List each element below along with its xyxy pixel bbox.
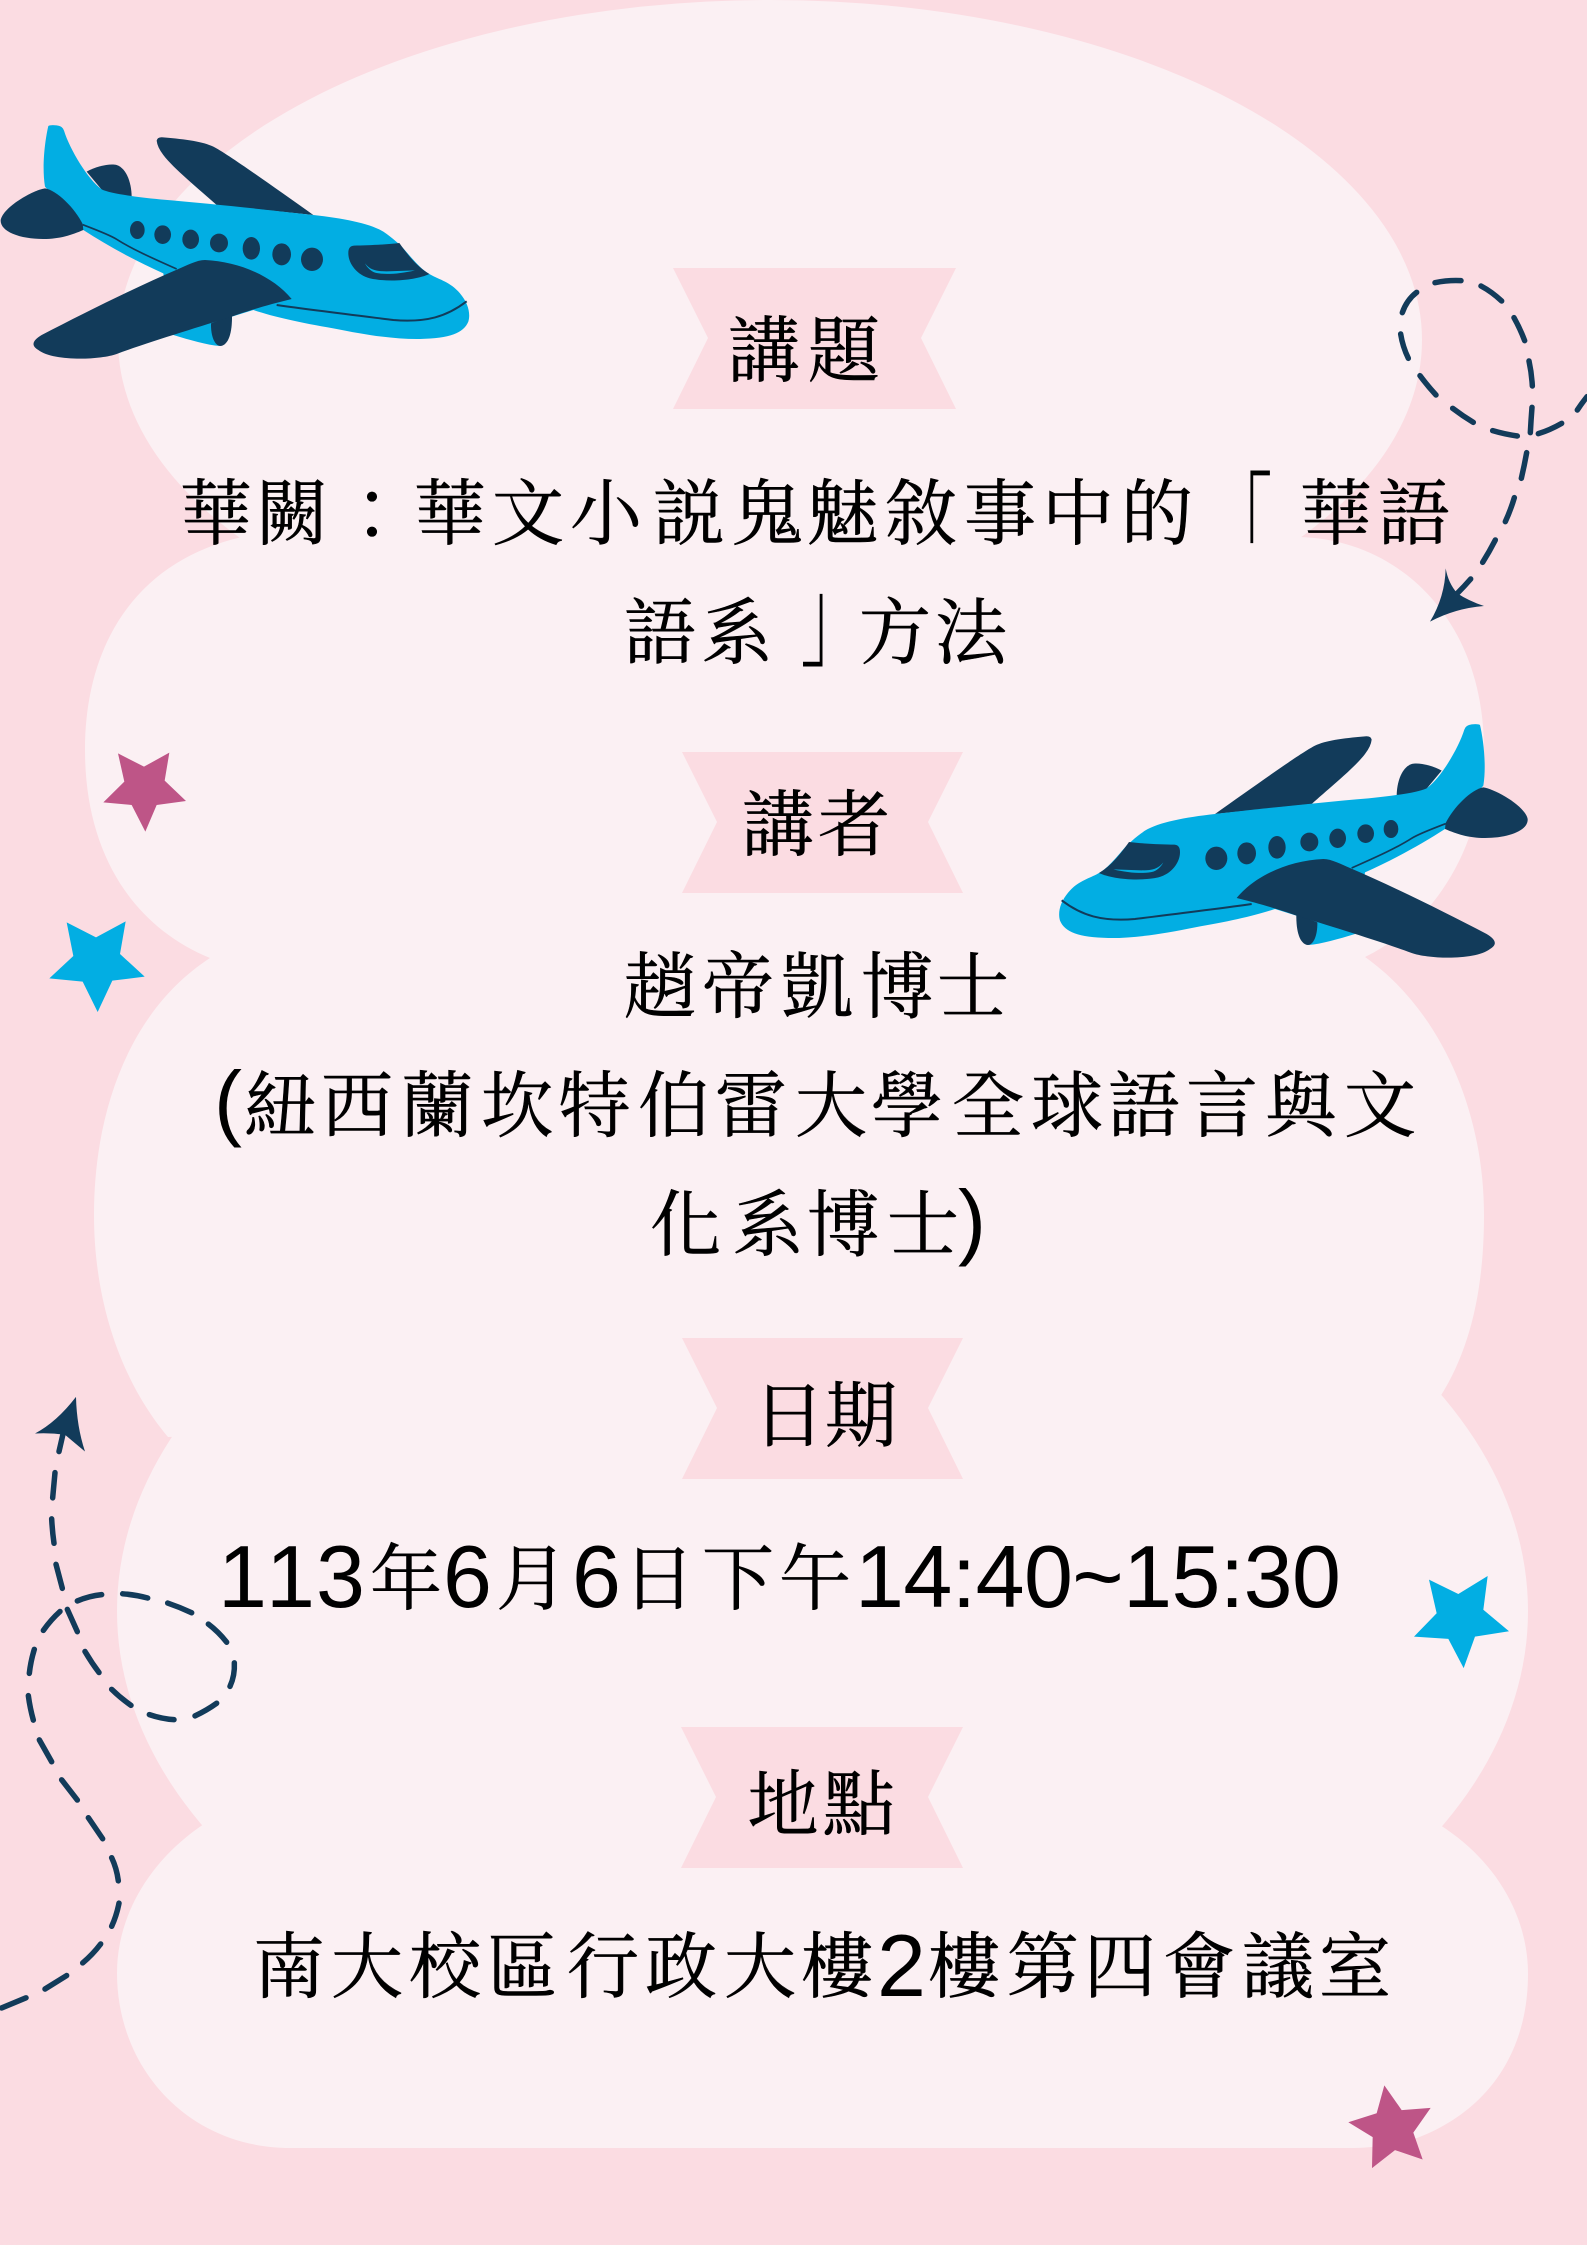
icon: dashed flight path top right <box>1401 281 1587 593</box>
text: speaker name and affiliation: 趙帝凱博士 <box>624 929 1009 1033</box>
banner: location heading <box>681 1727 963 1868</box>
text: location: 樓第四會議室 <box>928 1909 1391 2013</box>
text: speaker name and affiliation: 紐西蘭坎特伯雷大學全球語言與文 <box>244 1048 1416 1152</box>
icon: arrowhead top right <box>1430 568 1484 622</box>
text: speaker name and affiliation: 化系博士 <box>650 1167 959 1271</box>
text: date and time <box>218 1521 1341 1626</box>
text: date and time: 113 <box>218 1527 365 1626</box>
icon: airplane right <box>1059 724 1528 958</box>
text: date and time: 6 <box>443 1527 492 1626</box>
icon: blue star right <box>1414 1576 1509 1668</box>
text: lecture title <box>180 437 1450 689</box>
text: speaker name and affiliation: ) <box>958 1173 986 1267</box>
banner: speaker heading <box>682 752 963 893</box>
text: location: 2 <box>877 1916 926 2015</box>
text: date and time: 6 <box>572 1527 621 1626</box>
text: date and time: 14:40~15:30 <box>855 1527 1341 1626</box>
icon: dashed flight path lower left <box>2 1433 234 2008</box>
icon: magenta star bottom right <box>1348 2085 1431 2168</box>
text: speaker name and affiliation <box>214 929 1416 1271</box>
text: lecture title: 」 <box>801 530 863 689</box>
text: location: 南大校區行政大樓 <box>253 1909 873 2013</box>
heading: location: 地點 <box>747 1747 895 1851</box>
icon: airplane top left <box>1 125 469 359</box>
heading: topic: 講題 <box>728 293 881 397</box>
banner: date heading <box>682 1338 963 1479</box>
icon: magenta star left <box>103 753 186 832</box>
text: speaker name and affiliation: ( <box>214 1054 242 1148</box>
heading: date: 日期 <box>753 1358 897 1462</box>
text: lecture title: 語系 <box>624 575 772 679</box>
text: lecture title: 華語 <box>1300 456 1450 560</box>
text: date and time: 月 <box>496 1521 568 1625</box>
heading: speaker: 講者 <box>742 767 890 871</box>
icon: arrowhead lower left <box>35 1397 85 1452</box>
text: location <box>253 1909 1391 2015</box>
icon: blue star left <box>49 921 145 1012</box>
text: lecture title: 方法 <box>859 575 1008 679</box>
text: date and time: 日 <box>623 1521 695 1625</box>
text: date and time: 下午 <box>702 1521 851 1625</box>
banner: topic heading <box>673 268 956 409</box>
text: lecture title: 華闕：華文小説鬼魅敘事中的 <box>180 456 1193 560</box>
text: date and time: 年 <box>370 1521 442 1625</box>
text: lecture title: 「 <box>1210 437 1272 596</box>
